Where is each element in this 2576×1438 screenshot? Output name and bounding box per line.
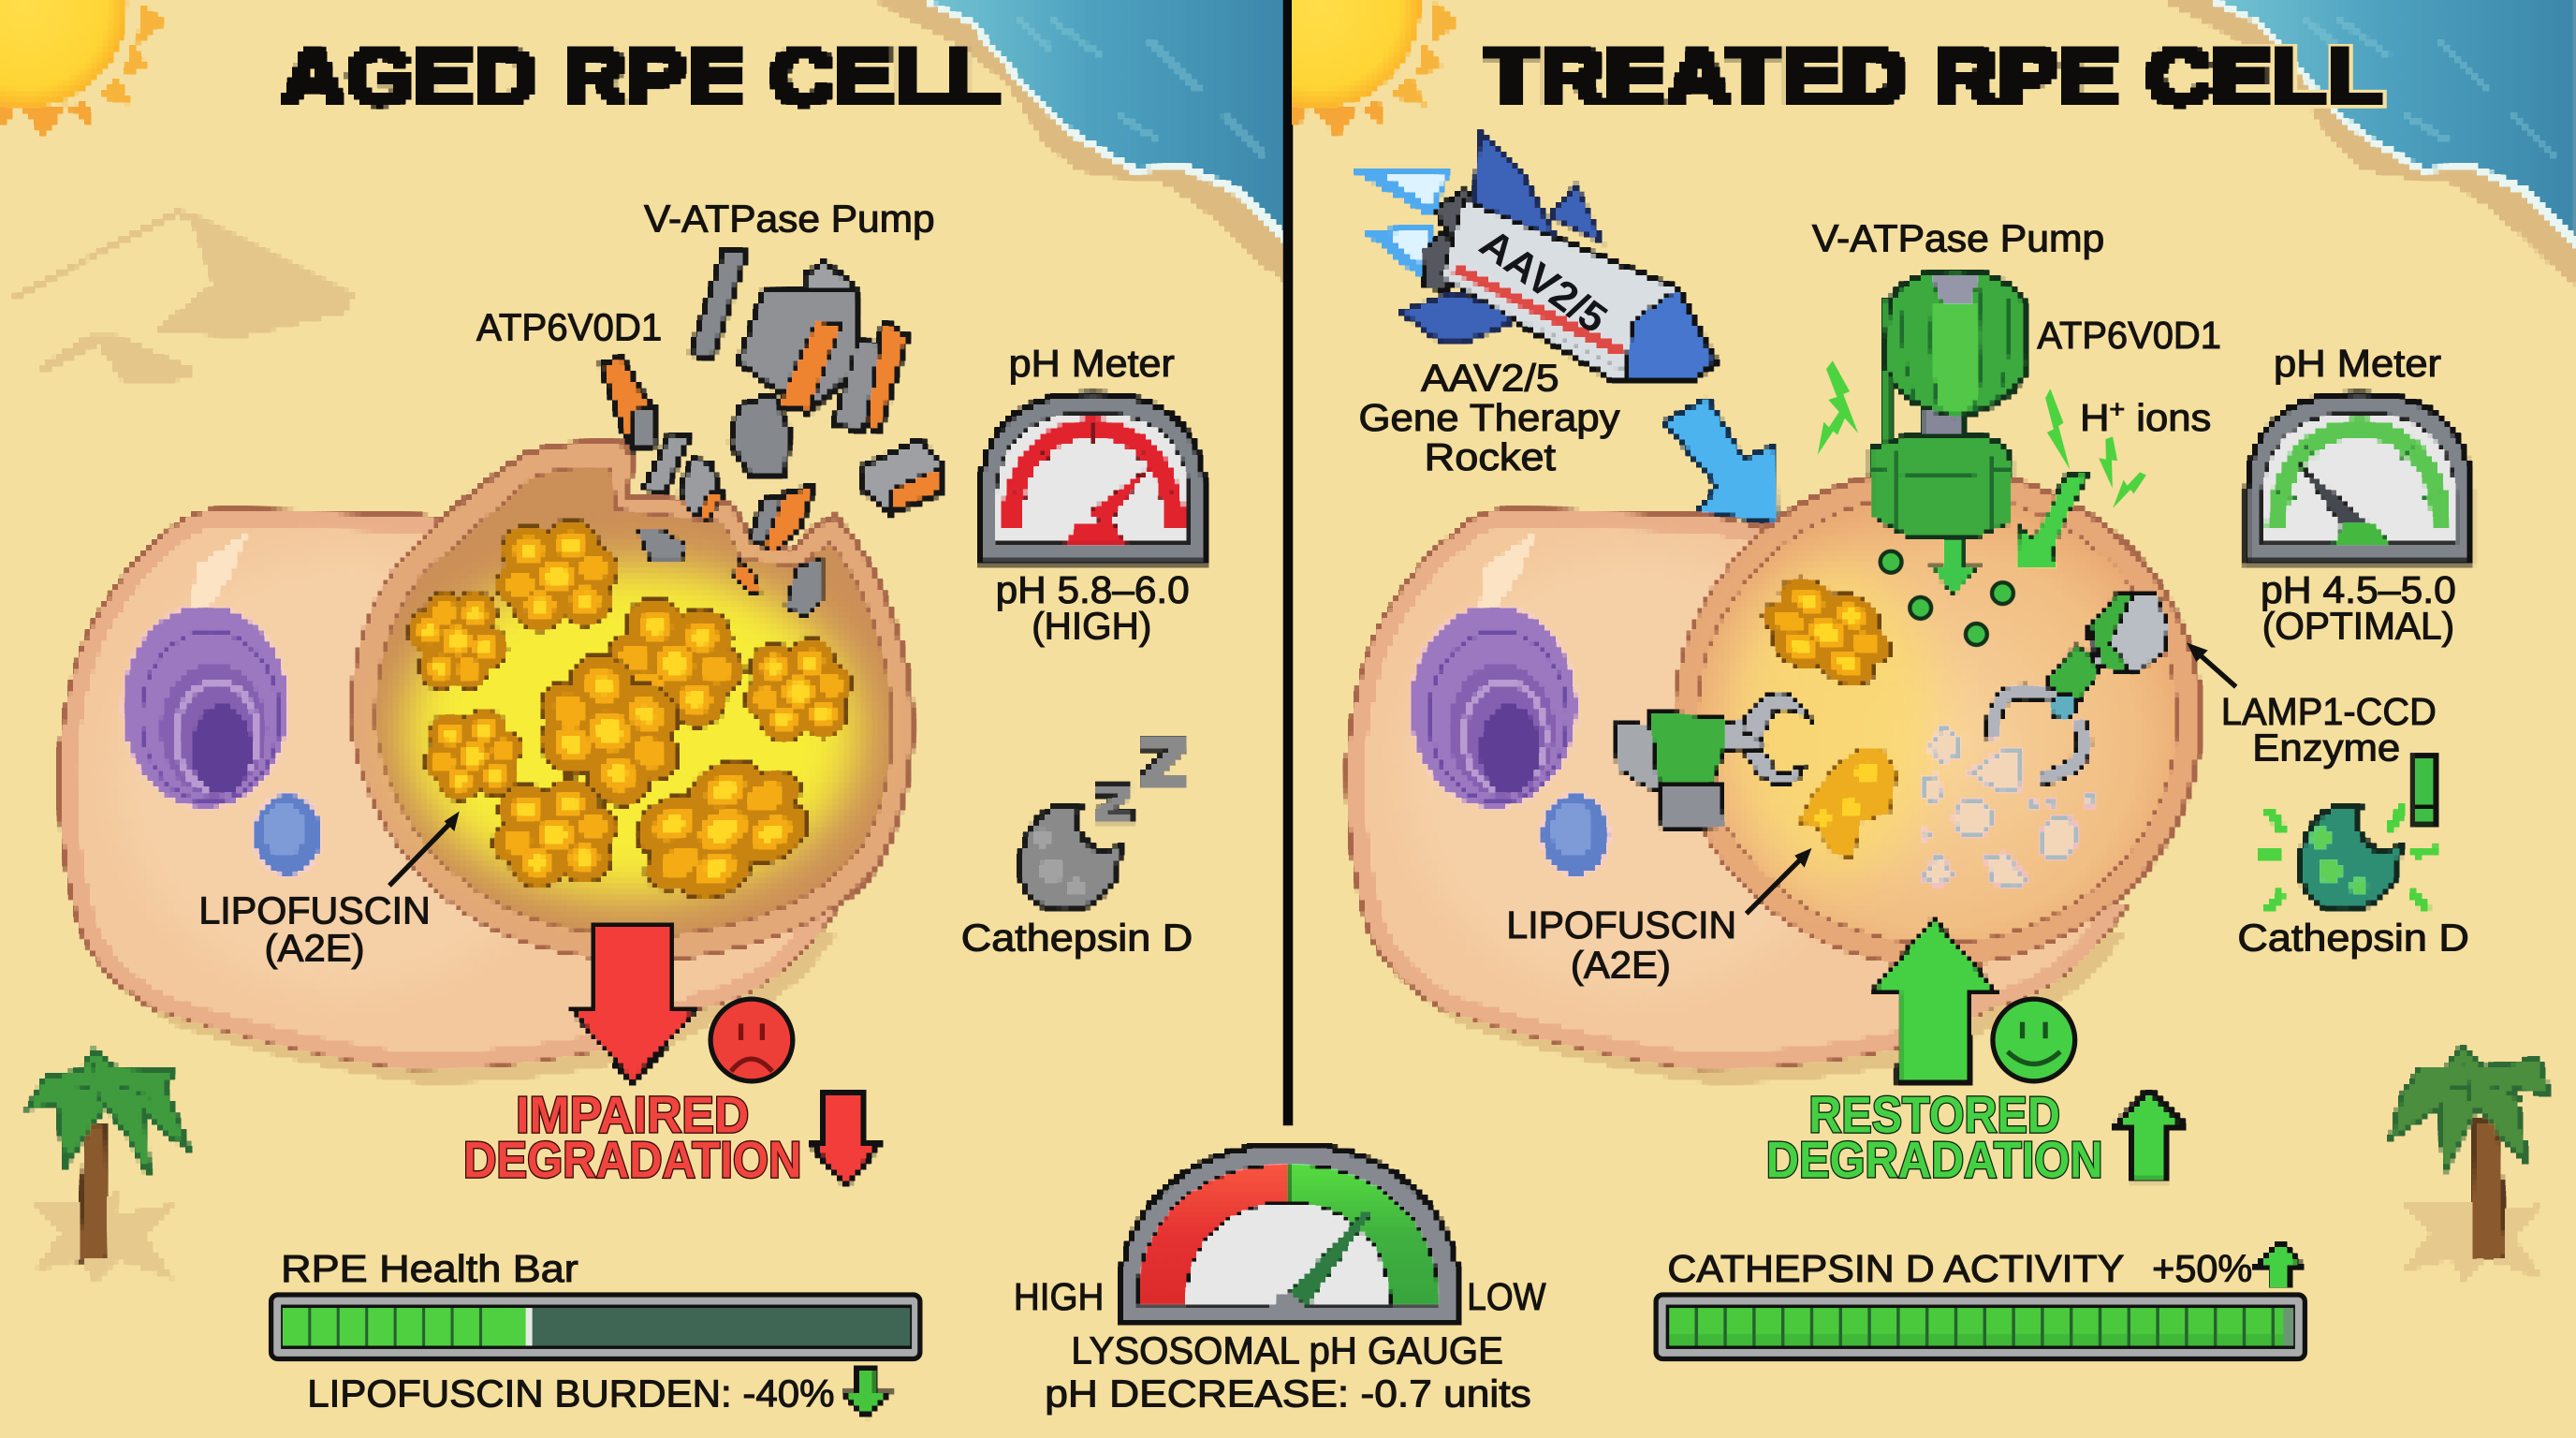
arrow: small green up: [2116, 1091, 2184, 1180]
label: pH Meter: pH Meter: [1009, 342, 1175, 385]
labels: treated panel: [1358, 217, 2469, 1290]
labels: aged panel: [198, 197, 1193, 1415]
label: RPE Health Bar: RPE Health Bar: [281, 1247, 578, 1290]
title: treated: TREATED RPE CELL: [1484, 33, 2384, 121]
sun left: [0, 0, 165, 137]
arrow: large red down: [568, 923, 698, 1081]
icon: sad face: [710, 999, 793, 1081]
pH meter: high: [981, 394, 1204, 562]
icon: green up arrow: [2259, 1242, 2300, 1286]
robot arm: right: [1993, 592, 2169, 779]
label: LAMP1-CCD enzyme: [2221, 690, 2437, 770]
label: impaired degradation: [463, 1086, 801, 1189]
rocket nose: [1625, 289, 1715, 381]
label: rocket: Gene Therapy: [1358, 396, 1620, 439]
label: pH high value: [996, 568, 1190, 648]
panel: aged RPE cell: [0, 0, 1288, 1416]
label: lipofuscin: [198, 888, 431, 970]
icon: smile face: [1993, 999, 2075, 1081]
rocket flames: [1349, 168, 1449, 279]
label: restored degradation: RESTORED: [1808, 1086, 2060, 1143]
label: pH high value: (HIGH): [1032, 605, 1151, 648]
label: restored degradation: DEGRADATION: [1766, 1132, 2103, 1189]
label: rocket: AAV2/5: [1421, 357, 1559, 400]
sun right: [1292, 0, 1456, 137]
central lysosomal pH gauge: [1014, 1145, 1546, 1415]
label: H+ ions: ions: [2125, 396, 2211, 439]
icon: sleeping cathepsin D: [1021, 738, 1186, 910]
label: restored degradation: [1766, 1086, 2103, 1189]
robot arm: left: [1614, 692, 1812, 829]
palm tree right: [2392, 1049, 2548, 1282]
callout lines: treated panel: [1747, 644, 2236, 914]
title: treated: TREATED RPE CELL: [1484, 33, 2384, 121]
pH meter: optimal: [2247, 394, 2471, 562]
gauge label: LOW: LOW: [1467, 1275, 1546, 1318]
label: lipofuscin: (A2E): [265, 927, 365, 970]
label: V-ATPase Pump: V-ATPase Pump: [644, 197, 935, 240]
label: cathepsin D activity: +50%: [2152, 1247, 2252, 1290]
label: lipofuscin: LIPOFUSCIN: [198, 888, 431, 932]
label: rocket: [1358, 357, 1620, 478]
label: cathepsin D activity: CATHEPSIN D ACTIVITY: [1667, 1247, 2124, 1290]
label: Cathepsin D: Cathepsin D: [2237, 916, 2469, 959]
gauge dial: [1120, 1145, 1459, 1321]
cell body: [69, 520, 835, 1083]
label: LAMP1-CCD enzyme: LAMP1-CCD: [2221, 690, 2437, 733]
rocket: AAV2/5: [1349, 135, 1715, 381]
label: lipofuscin: (A2E): [1571, 943, 1671, 986]
V-ATPase pump: restored: [1871, 271, 2027, 536]
label: H+ ions: +: [2109, 395, 2125, 423]
cell body right: [1357, 520, 2123, 1083]
rocket fins: [1403, 135, 1600, 342]
label: pH optimal value: pH 4.5–5.0: [2261, 568, 2456, 611]
degraded debris: [1922, 726, 2095, 888]
label: impaired degradation: IMPAIRED: [516, 1086, 749, 1143]
divider: [1283, 0, 1293, 1125]
label: Cathepsin D: Cathepsin D: [961, 916, 1193, 959]
activity bar: [1656, 1295, 2305, 1358]
label: V-ATPase Pump: V-ATPase Pump: [1812, 217, 2104, 260]
rocket engines: [1421, 191, 1482, 289]
label: ATP6V0D1: ATP6V0D1: [476, 305, 662, 348]
gauge caption: [1045, 1329, 1531, 1415]
gauge label: HIGH: HIGH: [1014, 1275, 1104, 1318]
lysosome: [350, 443, 912, 961]
gauge caption: LYSOSOMAL pH GAUGE: [1071, 1329, 1503, 1372]
label: LAMP1-CCD enzyme: Enzyme: [2252, 726, 2400, 770]
energy sparks: [1804, 360, 2153, 508]
lipofuscin clumps: [403, 521, 850, 919]
arrow: large green up: [1871, 918, 1998, 1081]
icon: active cathepsin D: [2258, 757, 2438, 912]
gauge caption: pH DECREASE: -0.7 units: [1045, 1372, 1531, 1415]
title: aged: AGED RPE CELL: [281, 33, 1003, 121]
label: lipofuscin: [1506, 903, 1736, 986]
arrow: blue delivery: [1666, 399, 1776, 522]
label: lipofuscin burden: LIPOFUSCIN BURDEN: -40%: [307, 1372, 835, 1415]
label: pH high value: pH 5.8–6.0: [996, 568, 1190, 611]
arrow: diagonal H+: [2017, 473, 2086, 568]
arrow: pump flow down: [1930, 540, 1980, 594]
broken V-ATPase pump fragments: [601, 250, 943, 616]
label: impaired degradation: DEGRADATION: [463, 1132, 801, 1189]
rocket body: [1442, 200, 1677, 381]
label: H+ ions: H: [2080, 396, 2107, 439]
rocket label: AAV2/5: [1471, 220, 1616, 343]
icon: green down arrow: [846, 1371, 887, 1416]
callout line: lipofuscin left: [389, 815, 457, 886]
lipofuscin remnants: [1751, 565, 1904, 858]
label: pH optimal value: (OPTIMAL): [2262, 605, 2454, 648]
health bar: [271, 1295, 920, 1358]
label: lipofuscin: LIPOFUSCIN: [1506, 903, 1736, 946]
lysosome right: [1674, 470, 2200, 966]
panel: treated RPE cell: [1216, 0, 2576, 1286]
arrow: small red down: [812, 1094, 879, 1184]
dunes: [11, 211, 353, 385]
label: pH Meter: pH Meter: [2274, 342, 2441, 385]
label: rocket: Rocket: [1425, 435, 1556, 478]
label: pH optimal value: [2261, 568, 2456, 648]
H+ dots: [1881, 551, 2013, 645]
ocean right: [2162, 0, 2576, 285]
ocean left: [874, 0, 1288, 285]
label: ATP6V0D1: ATP6V0D1: [2037, 314, 2221, 357]
palm tree left: [30, 1051, 187, 1282]
